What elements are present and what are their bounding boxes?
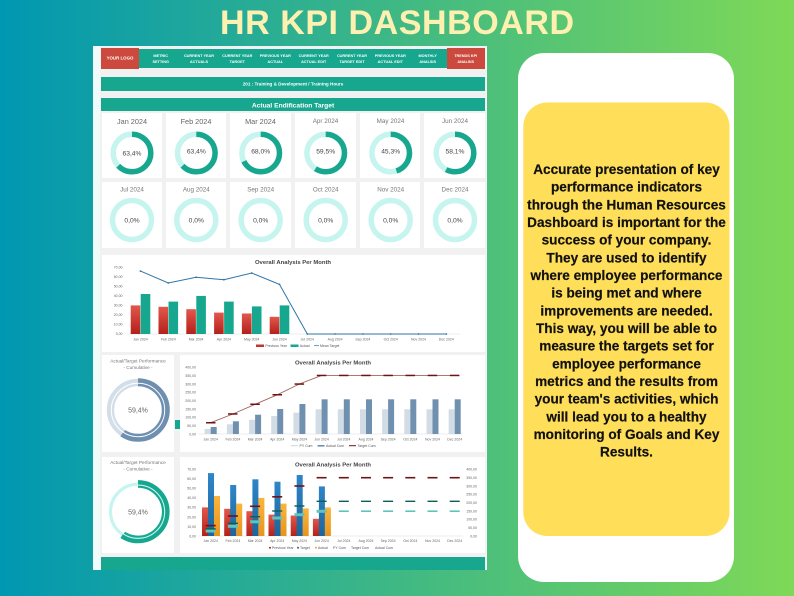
chart: monthly bars and target line: Apr 2024	[217, 338, 231, 342]
metric banner	[101, 77, 485, 91]
donut: Mar 2024	[242, 117, 280, 172]
chart: combined bars and markers: Mar 2024	[248, 539, 263, 543]
chart: combined bars and markers: 200,00	[466, 501, 477, 505]
chart: monthly bars and target line: Feb 2024	[161, 338, 176, 342]
description text: improvements are needed.	[540, 303, 713, 318]
donut: Sep 2024	[241, 186, 280, 240]
chart: combined bars and markers: Aug 2024	[358, 539, 374, 543]
teal tab	[175, 420, 180, 429]
navigation bar: CURRENT YEAR	[222, 54, 253, 58]
donut: Sep 2024: Sep 2024	[247, 186, 275, 194]
navigation bar: CURRENT YEAR	[184, 54, 214, 58]
donut: Jul 2024: Jul 2024	[120, 186, 144, 194]
description text: employee performance	[552, 356, 701, 371]
chart: cumulative bars: Nov 2024	[425, 438, 440, 442]
donut: Nov 2024: 0,0%	[383, 218, 398, 224]
chart: cumulative bars: 250,00	[185, 391, 196, 395]
chart: cumulative bars: Sep 2024	[381, 438, 396, 442]
description text: where employee performance	[530, 268, 723, 283]
chart: monthly bars and target line: 40,00	[114, 294, 123, 298]
donut: Sep 2024: 0,0%	[253, 218, 268, 224]
chart: combined bars and markers: 0,00	[189, 534, 196, 538]
panel: cumulative donut blue: Actual/Target Performance	[110, 358, 166, 364]
panel: cumulative donut blue	[102, 355, 174, 452]
chart: cumulative bars: Dec 2024	[447, 438, 462, 442]
chart: cumulative bars: 400,00	[185, 366, 196, 370]
chart: monthly bars and target line: Aug 2024	[328, 338, 343, 342]
donut: Oct 2024: 0,0%	[318, 218, 333, 224]
chart: combined bars and markers: 400,00	[466, 468, 477, 472]
donut: Feb 2024: 63,4%	[187, 148, 206, 156]
description text: will lead you to a healthy	[545, 409, 707, 424]
panel: cumulative donut blue: 59,4%	[128, 408, 148, 415]
chart: monthly bars and target line: 0,00	[116, 332, 123, 336]
chart: monthly bars and target line: May 2024	[244, 338, 259, 342]
donut: Dec 2024: Dec 2024	[442, 186, 469, 194]
description text: your team's activities, which	[535, 392, 718, 407]
description text: measure the targets set for	[539, 339, 714, 354]
chart: combined bars and markers: 0,00	[470, 534, 477, 538]
legend: PY Cum	[333, 546, 346, 550]
description text: Accurate presentation of key	[533, 162, 720, 177]
chart: monthly bars and target line: Overall Analysis Per Month	[255, 260, 331, 266]
legend: Actual	[300, 344, 310, 348]
navigation bar: ACTUAL EDIT	[378, 60, 404, 64]
donut: Mar 2024: Mar 2024	[245, 117, 276, 126]
navigation bar: PREVIOUS YEAR	[375, 54, 406, 58]
legend: Actual	[318, 546, 328, 550]
navigation bar: CURRENT YEAR	[299, 54, 329, 58]
donut: Aug 2024: Aug 2024	[183, 186, 210, 194]
chart: combined bars and markers: Feb 2024	[226, 539, 240, 543]
donut: Apr 2024: Apr 2024	[313, 118, 339, 125]
chart: cumulative bars: Mar 2024	[248, 438, 263, 442]
legend: Target Cum	[358, 444, 376, 448]
chart: monthly bars and target line: Jul 2024	[301, 338, 314, 342]
chart: cumulative bars: 100,00	[185, 416, 196, 420]
panel: cumulative donut teal: - Cumulative -	[123, 466, 153, 472]
chart: combined bars and markers: 50,00	[468, 526, 477, 530]
panel: cumulative donut teal: 59,4%	[128, 509, 148, 516]
description text	[527, 162, 726, 460]
donut: Mar 2024: 68,0%	[251, 148, 270, 156]
chart: monthly bars and target line: 60,00	[114, 275, 123, 279]
chart: monthly bars and target line: Nov 2024	[411, 338, 426, 342]
chart: monthly bars and target line: 20,00	[114, 313, 123, 317]
chart: combined bars and markers: 100,00	[466, 518, 477, 522]
navigation bar: ANALSIS	[419, 60, 436, 64]
legend: Target	[300, 546, 310, 550]
navigation bar: ANALSIS	[457, 60, 474, 64]
donut: Jul 2024	[112, 186, 152, 240]
navigation bar: CURRENT YEAR	[337, 54, 367, 58]
navigation bar: MONTHLY	[418, 54, 437, 58]
donut: Aug 2024	[177, 186, 216, 240]
chart: monthly bars and target line: Dec 2024	[439, 338, 454, 342]
chart: combined bars and markers: Jun 2024	[314, 539, 329, 543]
navigation bar	[101, 48, 485, 69]
chart: monthly bars and target line: 70,00	[114, 266, 123, 270]
donut: Aug 2024: 0,0%	[189, 218, 204, 224]
chart: combined bars and markers: 10,00	[187, 525, 196, 529]
chart: cumulative bars: Jul 2024	[337, 438, 350, 442]
chart: cumulative bars: Apr 2024	[270, 438, 284, 442]
donut: Dec 2024: 0,0%	[447, 218, 463, 224]
chart: combined bars and markers: 60,00	[187, 477, 196, 481]
chart: combined bars and markers: Overall Analysis Per Month	[295, 462, 371, 468]
donut: Oct 2024: Oct 2024	[313, 186, 339, 194]
chart: cumulative bars: Jun 2024	[314, 438, 329, 442]
chart: combined bars and markers: 20,00	[187, 515, 196, 519]
legend: PY Cum	[300, 444, 313, 448]
donut: Apr 2024: 59,5%	[316, 148, 335, 156]
legend: Actual Cum	[326, 444, 344, 448]
description text: This way, you will be able to	[536, 321, 717, 336]
description text: Dashboard is important for the	[527, 215, 726, 230]
donut: Feb 2024	[178, 117, 215, 172]
chart: cumulative bars: Overall Analysis Per Month	[295, 360, 371, 366]
description text: They are used to identify	[546, 250, 707, 265]
navigation bar: PREVIOUS YEAR	[260, 54, 291, 58]
title: HR KPI DASHBOARD	[220, 4, 574, 42]
chart: monthly bars and target line: 30,00	[114, 304, 123, 308]
markers: target cumulative	[206, 477, 460, 526]
panel: cumulative donut teal	[102, 457, 174, 553]
legend: Actual Cum	[375, 546, 393, 550]
description text: through the Human Resources	[527, 197, 726, 212]
section heading: Actual Endification Target	[252, 102, 335, 109]
chart: cumulative bars: Jan 2024	[203, 438, 218, 442]
navigation bar: SETTING	[152, 60, 169, 64]
markers: prior year cumulative	[206, 510, 460, 532]
panel: cumulative donut blue: - Cumulative -	[123, 365, 153, 370]
chart: cumulative bars: 150,00	[185, 407, 196, 411]
donut: Oct 2024	[306, 186, 345, 240]
markers: actual cumulative	[206, 501, 460, 530]
chart: combined bars and markers: Jul 2024	[337, 539, 350, 543]
navigation bar: METRIC	[153, 54, 168, 58]
chart: monthly bars and target line: Jun 2024	[272, 338, 287, 342]
legend: Previous Year	[265, 344, 288, 348]
description text: performance indicators	[551, 180, 702, 195]
donut: Jun 2024: Jun 2024	[442, 118, 468, 125]
chart: cumulative bars: 300,00	[185, 382, 196, 386]
chart: combined bars and markers: 150,00	[466, 509, 477, 513]
panel: cumulative donut teal: Actual/Target Performance	[110, 460, 166, 465]
legend	[269, 546, 393, 550]
description text: monitoring of Goals and Key	[534, 427, 720, 442]
donut: Jan 2024: Jan 2024	[117, 117, 147, 126]
chart: monthly bars and target line: Mar 2024	[189, 338, 204, 342]
chart: monthly bars and target line	[102, 255, 485, 352]
donut: Jun 2024: 58,1%	[446, 148, 465, 156]
section heading	[101, 98, 485, 111]
navigation bar: TARGET	[230, 60, 246, 64]
chart: monthly bars and target line: 50,00	[114, 284, 123, 288]
donut: Nov 2024: Nov 2024	[377, 186, 405, 194]
chart: combined bars and markers: Sep 2024	[381, 539, 396, 543]
chart: monthly bars and target line: Sep 2024	[355, 338, 370, 342]
donut: Nov 2024	[371, 186, 410, 240]
chart: combined bars and markers: 70,00	[187, 468, 196, 472]
chart: combined bars and markers: Dec 2024	[447, 539, 462, 543]
panel: dashboard	[93, 46, 487, 570]
navigation bar: ACTUAL	[267, 60, 284, 64]
description text: metrics and the results from	[535, 374, 718, 389]
panel: description card	[518, 53, 734, 582]
donut: May 2024: May 2024	[377, 118, 405, 125]
legend	[291, 444, 376, 448]
donut: Dec 2024	[436, 186, 474, 240]
navigation bar: TARGET EDIT	[339, 60, 365, 64]
chart: combined bars and markers	[180, 457, 485, 553]
description text: is being met and where	[551, 286, 702, 301]
donut: Jan 2024	[113, 117, 151, 172]
chart: combined bars and markers: Nov 2024	[425, 539, 440, 543]
donut: May 2024	[372, 118, 410, 172]
donut: Jan 2024: 63,4%	[123, 150, 142, 158]
legend: Target Cum	[351, 546, 369, 550]
chart: combined bars and markers: 50,00	[187, 487, 196, 491]
chart: cumulative bars: Oct 2024	[403, 438, 417, 442]
chart: monthly bars and target line: 10,00	[114, 323, 123, 327]
footer band	[101, 557, 485, 570]
chart: combined bars and markers: Jan 2024	[203, 539, 218, 543]
chart: combined bars and markers: Oct 2024	[403, 539, 417, 543]
yellow callout	[523, 102, 730, 536]
donut: May 2024: 45,3%	[381, 148, 400, 156]
chart: combined bars and markers: 40,00	[187, 496, 196, 500]
chart: cumulative bars: 350,00	[185, 374, 196, 378]
metric banner: 201 : Training & Development / Training Hours	[243, 82, 344, 86]
chart: monthly bars and target line: Jan 2024	[133, 338, 148, 342]
description text: Results.	[600, 445, 653, 460]
monthly donut cards	[102, 113, 485, 248]
chart: monthly bars and target line: Oct 2024	[384, 338, 398, 342]
chart: combined bars and markers: Apr 2024	[270, 539, 284, 543]
donut: Feb 2024: Feb 2024	[181, 117, 211, 126]
legend	[256, 344, 339, 348]
chart: cumulative bars: 200,00	[185, 399, 196, 403]
chart: combined bars and markers: 30,00	[187, 506, 196, 510]
donut: Jul 2024: 0,0%	[124, 218, 140, 224]
donut: Apr 2024	[307, 118, 345, 172]
navigation bar: YOUR LOGO	[107, 56, 134, 60]
chart: cumulative bars: Feb 2024	[226, 438, 240, 442]
chart: combined bars and markers: May 2024	[292, 539, 307, 543]
chart: combined bars and markers: 250,00	[466, 493, 477, 497]
description text: success of your company.	[542, 233, 711, 248]
chart: combined bars and markers: 350,00	[466, 476, 477, 480]
navigation bar: ACTUALS	[190, 60, 209, 64]
chart: cumulative bars: Aug 2024	[358, 438, 374, 442]
chart: combined bars and markers: 300,00	[466, 484, 477, 488]
navigation bar: ACTUAL EDIT	[301, 60, 327, 64]
chart: cumulative bars: 0,00	[189, 432, 196, 436]
chart: cumulative bars: 50,00	[187, 424, 196, 428]
navigation bar: TRENDS KPI	[454, 54, 477, 58]
legend: Mean Target	[320, 344, 339, 348]
donut: Jun 2024	[436, 118, 474, 172]
chart: cumulative bars	[180, 355, 485, 452]
chart: cumulative bars: May 2024	[292, 438, 307, 442]
legend: Previous Year	[272, 546, 294, 550]
